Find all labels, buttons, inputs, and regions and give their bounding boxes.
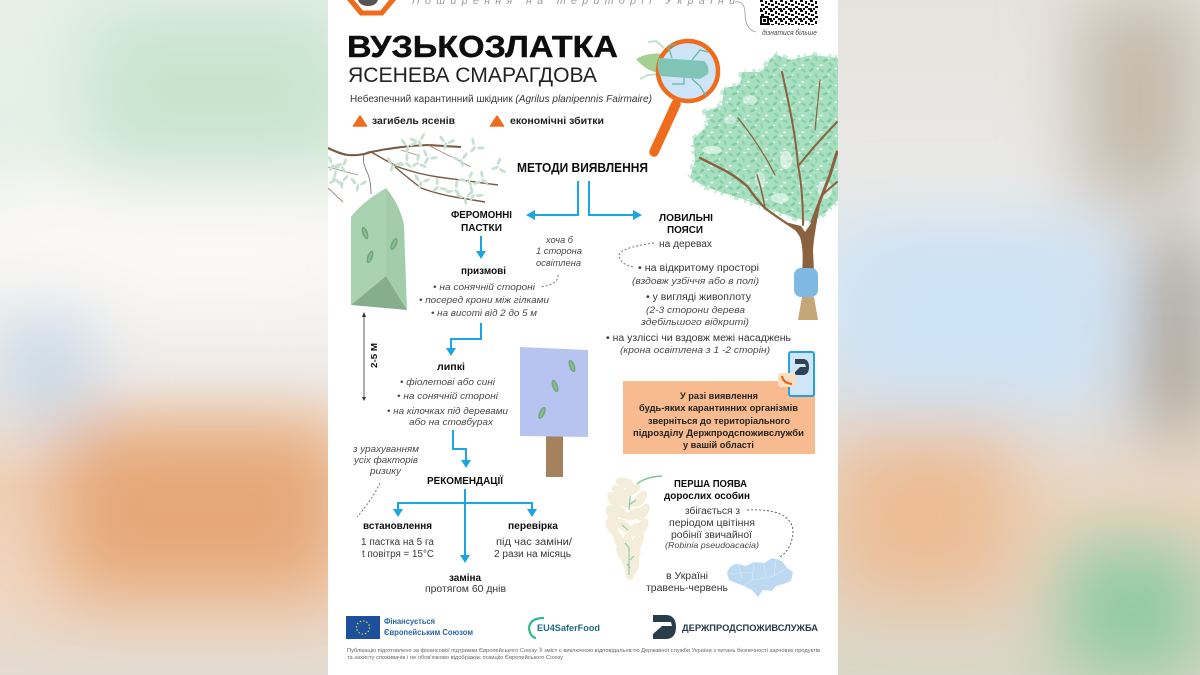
dashed pointer to QR code — [735, 2, 756, 32]
magnifier handle — [654, 104, 676, 152]
text: in Ukraine May-June: в Україні — [666, 571, 708, 582]
tree crown — [690, 54, 838, 222]
sticky traps text — [387, 361, 509, 428]
callout: report quarantine organisms: зверніться до територіального — [648, 416, 790, 427]
note: at least one lit side — [536, 235, 582, 287]
dashed pointer — [619, 243, 654, 267]
forest edge: (крона освітлена з 1 -2 сторін) — [620, 345, 770, 356]
heading: catching belts: ПОЯСИ — [667, 224, 703, 236]
sticky traps text: • на сонячній стороні — [397, 391, 499, 402]
logo: EU flag and funding text — [346, 616, 473, 639]
installation: 1 пастка на 5 га — [361, 537, 434, 548]
disclaimer: Публікацію підготовлено за фінансової підтримки Європейського Союзу. Її зміст є виключною відповідальністю Державної служби України з питань безпечності харчових продуктів — [347, 647, 820, 654]
text: in Ukraine May-June: травень-червень — [646, 583, 728, 594]
icon: phone — [789, 352, 814, 396]
icon: beetle under magnifier — [636, 41, 718, 152]
prism traps text: • на висоті від 2 до 5 м — [431, 308, 537, 319]
pheromone traps column — [387, 209, 582, 468]
prism pheromone trap — [351, 188, 407, 310]
first appearance text: ПЕРША ПОЯВА — [674, 478, 747, 490]
arrow to catching belts — [589, 181, 642, 220]
first appearance text: (Robinia pseudoacacia) — [665, 540, 759, 550]
heading: catching belts — [659, 212, 713, 236]
logo: EU4SaferFood: EU4SaferFood — [537, 623, 600, 634]
open space — [632, 263, 759, 287]
prism traps text: • на сонячній стороні — [433, 282, 536, 293]
note: risk factors: з урахуванням — [352, 444, 419, 454]
note: risk factors — [352, 444, 419, 517]
subtitle: ЯСЕНЕВА СМАРАГДОВА — [348, 64, 597, 87]
first appearance text: періодом цвітіння — [669, 518, 755, 529]
open space: (вздовж узбіччя або в полі) — [632, 276, 759, 287]
callout: report quarantine organisms — [623, 381, 815, 454]
hedge: здебільшого відкриті) — [640, 317, 749, 328]
prism traps text: • посеред крони між гілками — [419, 295, 550, 306]
arrow to pheromone traps — [526, 181, 578, 220]
arrow to sticky traps — [446, 323, 481, 356]
logo: EU flag and funding text: Європейським Союзом — [384, 627, 473, 637]
poster content — [322, 0, 838, 661]
logo: EU4SaferFood — [529, 618, 600, 638]
logo: Derzhprodspozhyvsluzhba: ДЕРЖПРОДСПОЖИВСЛУЖБА — [682, 623, 818, 634]
heading: pheromone traps — [451, 209, 512, 234]
hedge — [640, 292, 751, 328]
heading: catching belts: ЛОВИЛЬНІ — [659, 212, 713, 224]
icon: phone call bubble — [778, 373, 796, 387]
title — [347, 29, 618, 87]
heading: pheromone traps: ПАСТКИ — [461, 222, 502, 234]
magnifier lens — [658, 41, 718, 101]
note: risk factors: ризику — [369, 466, 402, 476]
forest edge — [606, 333, 791, 356]
inspection: під час заміни/ — [496, 537, 572, 548]
heading: recommendations: РЕКОМЕНДАЦІЇ — [427, 474, 504, 487]
note: at least one lit side: хоча б — [545, 235, 574, 245]
installation: встановлення — [363, 520, 432, 532]
arrow to recommendations — [453, 430, 471, 468]
callout: report quarantine organisms: підрозділу Держпродспоживслужби — [633, 428, 804, 439]
tree branches — [700, 72, 837, 232]
warning: ash death: загибель ясенів — [372, 115, 456, 127]
sticky traps text: • фіолетові або сині — [400, 377, 496, 388]
dashed arrow to map — [747, 510, 793, 557]
height marker 2-5 m: 2-5 М — [369, 343, 379, 368]
replacement: заміна — [449, 572, 481, 584]
top logo: orange hexagon — [347, 0, 396, 16]
description: Небезпечний карантинний шкідник (Agrilus planipennis Fairmaire) — [350, 93, 652, 105]
QR caption: дізнатися більше — [762, 29, 817, 37]
installation: t повітря = 15°C — [362, 549, 434, 560]
callout: report quarantine organisms: у вашій області — [683, 440, 754, 451]
first appearance text: збігається з — [685, 505, 740, 517]
map of Ukraine — [727, 558, 793, 597]
prism traps text — [419, 265, 550, 319]
hedge: (2-3 сторони дерева — [646, 305, 745, 316]
note: at least one lit side: 1 сторона — [536, 246, 582, 256]
recommendations arrows — [393, 489, 537, 563]
heading: pheromone traps: ФЕРОМОННІ — [451, 209, 512, 221]
note: risk factors: усіх факторів — [353, 455, 418, 465]
tree with catching belt — [690, 54, 838, 320]
icon: robinia flower — [603, 476, 662, 580]
QR code — [760, 0, 818, 25]
hedge: • у вигляді живоплоту — [646, 292, 751, 303]
arrow down to prism traps — [476, 236, 486, 259]
installation — [361, 520, 434, 560]
sticky traps text: липкі — [437, 361, 465, 373]
first appearance text: робінії звичайної — [671, 529, 752, 541]
warning: economic losses: економічні збитки — [510, 115, 604, 127]
replacement — [425, 572, 506, 595]
open space: • на відкритому просторі — [638, 263, 759, 274]
replacement: протягом 60 днів — [425, 584, 506, 595]
inspection — [494, 520, 572, 560]
logo: EU flag and funding text: Фінансується — [384, 616, 435, 626]
catching belt — [794, 268, 818, 297]
poster panel — [328, 0, 838, 675]
sticky traps text: або на стовбурах — [409, 417, 494, 428]
disclaimer — [347, 647, 820, 661]
forest edge: • на узліссі чи вздовж межі насаджень — [606, 333, 791, 344]
text: in Ukraine May-June — [646, 571, 728, 594]
catching belts text — [606, 212, 791, 356]
first appearance text — [664, 478, 759, 550]
sticky trap illustration — [520, 347, 588, 477]
callout: report quarantine organisms: будь-яких карантинних організмів — [639, 403, 798, 414]
logo: Derzhprodspozhyvsluzhba — [653, 615, 818, 639]
tree trunk — [785, 205, 820, 272]
height marker 2-5 m — [362, 312, 379, 401]
catching belts text: на деревах — [659, 239, 712, 250]
inspection: 2 рази на місяць — [494, 549, 571, 560]
trunk base — [798, 297, 818, 320]
note: at least one lit side: освітлена — [536, 258, 581, 268]
heading: detection methods: МЕТОДИ ВИЯВЛЕННЯ — [517, 161, 648, 175]
sticky traps text: • на кілочках під деревами — [387, 406, 509, 417]
title: ВУЗЬКОЗЛАТКА — [347, 29, 618, 64]
branch with leaves and trap wire — [322, 132, 507, 206]
disclaimer: та захисту споживачів і не обов'язково відображає позицію Європейського Союзу — [347, 654, 563, 661]
callout: report quarantine organisms: У разі виявлення — [680, 391, 758, 402]
inspection: перевірка — [508, 520, 558, 532]
first appearance text: дорослих особин — [664, 490, 750, 502]
prism traps text: призмові — [461, 265, 506, 277]
